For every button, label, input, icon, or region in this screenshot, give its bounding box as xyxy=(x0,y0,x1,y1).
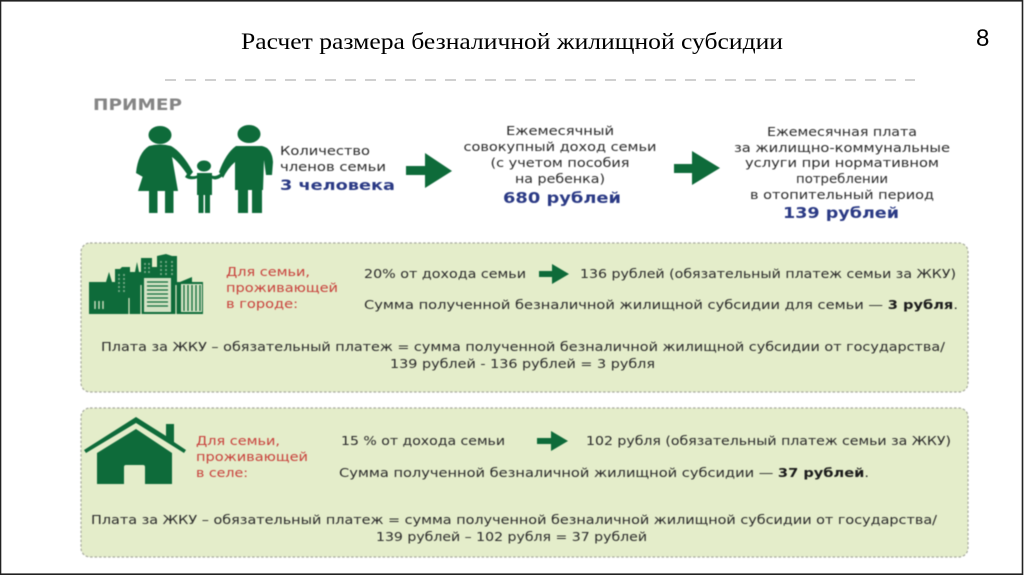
text: 20 percent of income: 20% от дохода семьи xyxy=(364,266,526,281)
text: family size: 3 человека xyxy=(280,178,395,194)
arrow: village xyxy=(537,431,568,451)
infographic body xyxy=(81,95,968,557)
heading: example: ПРИМЕР xyxy=(93,95,182,114)
text: city label: Для семьи, xyxy=(226,264,310,279)
icon: house xyxy=(84,417,186,484)
text: village label: проживающей xyxy=(196,449,308,464)
text: city subsidy: Сумма полученной безналичной жилищной субсидии для семьи — 3 рубля . xyxy=(364,297,958,312)
arrow: city xyxy=(539,264,569,284)
text: monthly payment: Ежемесячная плата xyxy=(767,124,917,139)
text: family income: (с учетом пособия xyxy=(490,155,630,170)
text: monthly payment: 139 рублей xyxy=(783,204,899,222)
text: city obligatory payment: 136 рублей (обязательный платеж семьи за ЖКУ) xyxy=(580,266,956,281)
text: family size: членов семьи xyxy=(280,159,386,174)
text: family income: Ежемесячный xyxy=(506,123,614,138)
text: city formula: 139 рублей - 136 рублей = 3 рубля xyxy=(390,356,655,371)
text: village formula: 139 рублей – 102 рубля = 37 рублей xyxy=(376,529,647,544)
page number: 8 xyxy=(976,25,989,52)
title: Расчет размера безналичной жилищной субсидии xyxy=(241,29,783,54)
text: family size xyxy=(280,143,395,194)
text: village obligatory payment: 102 рубля (обязательный платеж семьи за ЖКУ) xyxy=(586,433,951,448)
text: monthly payment xyxy=(734,124,950,222)
text: 15 percent of income: 15 % от дохода семьи xyxy=(341,433,505,448)
panel: city family xyxy=(81,243,968,392)
text: family income xyxy=(464,123,656,207)
text: village label: Для семьи, xyxy=(196,433,280,448)
text: village label: в селе: xyxy=(196,465,248,480)
text: monthly payment: за жилищно-коммунальные xyxy=(734,140,950,155)
panel: village family xyxy=(81,408,968,557)
icon: city buildings xyxy=(89,254,203,314)
text: city label xyxy=(226,264,338,311)
text: city formula xyxy=(101,339,946,371)
text: family income: совокупный доход семьи xyxy=(464,139,656,154)
text: village formula: Плата за ЖКУ – обязательный платеж = сумма полученной безналичной жилищной субсидии от государства/ xyxy=(91,512,938,527)
text: monthly payment: услуги при нормативном xyxy=(745,155,939,170)
text: village subsidy: Сумма полученной безналичной жилищной субсидии — 37 рублей . xyxy=(339,465,869,480)
text: village formula xyxy=(91,512,938,544)
text: village label xyxy=(196,433,308,480)
text: monthly payment: потреблении xyxy=(796,171,888,186)
arrow 1 xyxy=(406,153,452,188)
icon: family xyxy=(136,125,273,213)
text: city formula: Плата за ЖКУ – обязательный платеж = сумма полученной безналичной жилищной субсидии от государства/ xyxy=(101,339,946,354)
text: monthly payment: в отопительный период xyxy=(750,187,934,202)
text: city label: проживающей xyxy=(226,280,338,295)
text: family income: 680 рублей xyxy=(503,189,621,207)
text: family size: Количество xyxy=(280,143,370,158)
arrow 2 xyxy=(674,151,720,185)
text: family income: на ребенка) xyxy=(515,171,605,186)
text: city label: в городе: xyxy=(226,296,298,311)
